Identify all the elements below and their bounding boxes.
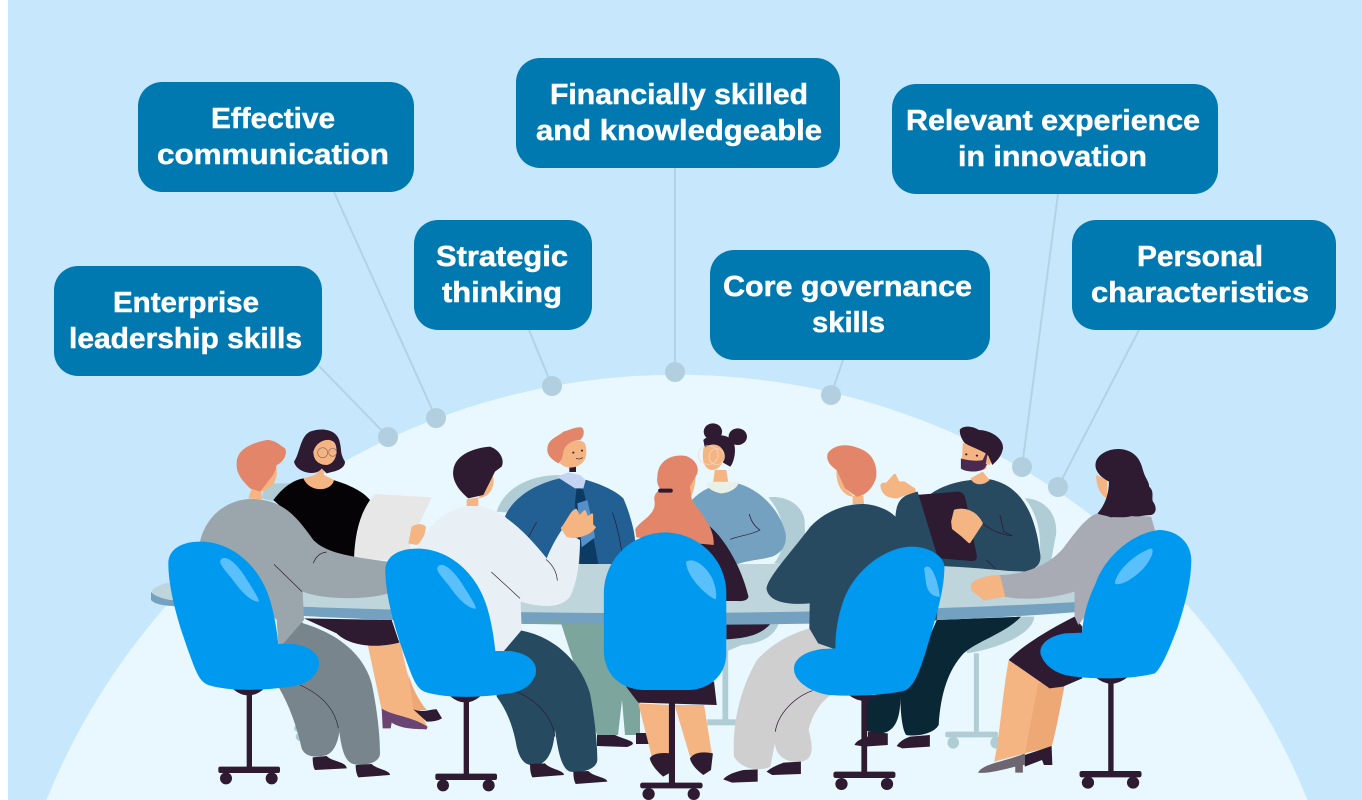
label: Enterprise leadership skills: Enterprise xyxy=(113,287,259,319)
person: woman in light blue with buns xyxy=(692,423,786,639)
person: woman with black top holding paper xyxy=(273,429,442,729)
label: Effective communication xyxy=(138,82,414,192)
person: woman with red hair from behind xyxy=(626,456,748,777)
label: Personal characteristics: Personal xyxy=(1137,241,1263,273)
label: Relevant experience in innovation xyxy=(892,84,1218,194)
dome xyxy=(46,375,1308,800)
person: seated legs in green trousers xyxy=(520,620,650,747)
label: Financially skilled and knowledgeable xyxy=(516,58,840,168)
label: Core governance skills: Core governance xyxy=(723,271,972,303)
label: Financially skilled and knowledgeable: Financially skilled xyxy=(550,79,808,111)
person: bearded man with tablet xyxy=(854,427,1040,748)
table xyxy=(151,564,1085,625)
label: Core governance skills: skills xyxy=(812,307,885,339)
person: man in blue suit xyxy=(505,427,635,565)
chair 4 xyxy=(794,547,944,790)
label: Enterprise leadership skills: leadership skills xyxy=(69,323,302,355)
label: Relevant experience in innovation: Relevant experience xyxy=(906,105,1200,137)
label: Strategic thinking xyxy=(414,220,592,330)
chair 3 xyxy=(604,532,726,800)
chair 1 xyxy=(168,542,319,784)
label: Relevant experience in innovation: in innovation xyxy=(958,141,1147,173)
person: woman in grey sweater from behind xyxy=(972,449,1156,773)
chair 5 xyxy=(1040,530,1191,789)
person: man in white shirt from behind xyxy=(417,447,607,784)
label: Strategic thinking: thinking xyxy=(442,277,562,309)
label: Effective communication: communication xyxy=(157,139,389,171)
label: Effective communication: Effective xyxy=(211,103,335,135)
label: Personal characteristics: characteristics xyxy=(1091,277,1309,309)
person: man in teal with grey trousers from behind xyxy=(723,445,941,783)
label: Personal characteristics xyxy=(1072,220,1336,330)
label: Strategic thinking: Strategic xyxy=(436,241,568,273)
back chairs xyxy=(262,475,1056,749)
label: Financially skilled and knowledgeable: and knowledgeable xyxy=(536,115,822,147)
label: Enterprise leadership skills xyxy=(54,266,322,376)
person: man in grey from behind xyxy=(200,440,390,777)
connectors xyxy=(319,168,1139,487)
chair 2 xyxy=(385,549,536,791)
connector dots xyxy=(378,362,1068,497)
label: Core governance skills xyxy=(710,250,990,360)
